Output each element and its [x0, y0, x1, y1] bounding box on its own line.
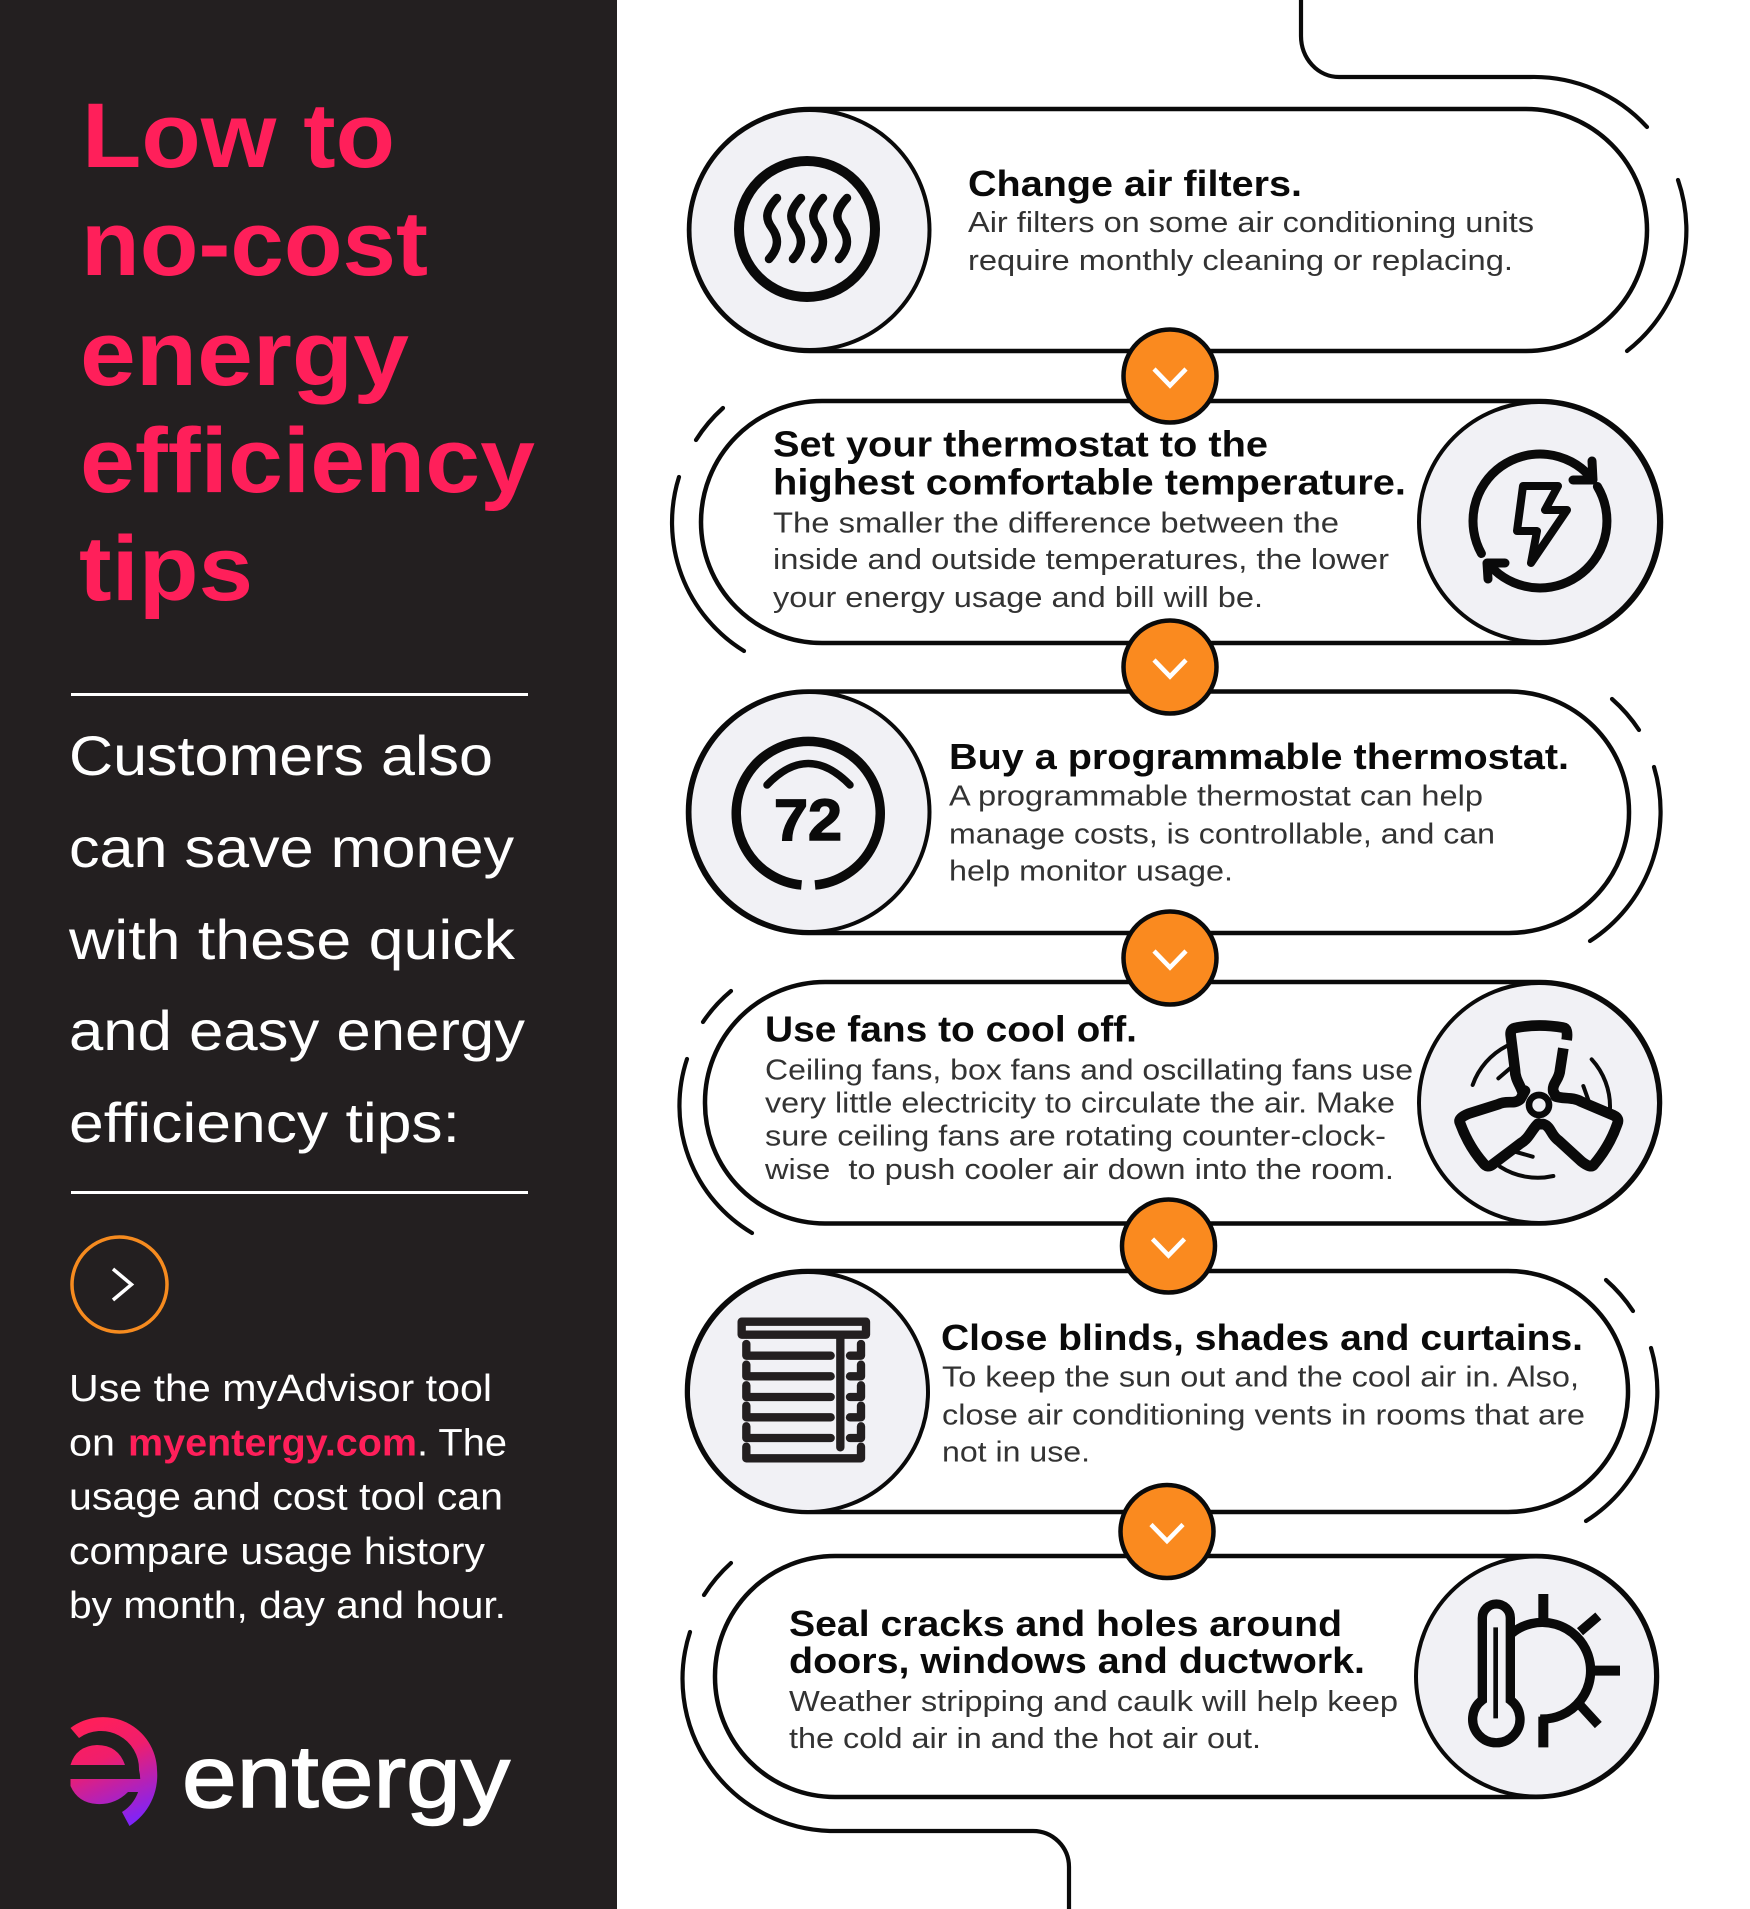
arrow button 4: [1122, 1200, 1215, 1292]
myAdvisor paragraph: by month, day and hour.: [69, 1585, 506, 1627]
myAdvisor paragraph: myentergy.com: [128, 1422, 417, 1464]
text: use fans: Ceiling fans, box fans and oscillating fans use: [765, 1054, 1413, 1086]
icon: energy cycle bolt: [1473, 454, 1607, 588]
text: seal cracks: [789, 1603, 1398, 1755]
text: change air filters: Change air filters.: [968, 163, 1302, 204]
title: efficiency: [80, 410, 535, 512]
text: use fans: wise to push cooler air down into the room.: [764, 1154, 1394, 1186]
panel: use fans: [705, 982, 1660, 1224]
text: set your thermostat: The smaller the difference between the: [773, 508, 1339, 540]
icon: heat vent: [739, 161, 875, 297]
myAdvisor paragraph: compare usage history: [69, 1531, 485, 1573]
panel: change air filters: [689, 109, 1647, 351]
text: change air filters: Air filters on some air conditioning units: [968, 207, 1534, 239]
text: buy a programmable thermostat: A programmable thermostat can help: [949, 780, 1483, 812]
text: set your thermostat: Set your thermostat to the: [773, 424, 1268, 464]
text: close blinds: Close blinds, shades and curtains.: [941, 1317, 1583, 1358]
intro text: Customers also: [69, 724, 493, 787]
panel: close blinds: [687, 1271, 1628, 1512]
myAdvisor paragraph: usage and cost tool can: [69, 1477, 503, 1519]
panel: left sidebar: [0, 0, 617, 1909]
connector: top line and card 1 arcs: [1301, 0, 1686, 351]
title: energy: [80, 303, 409, 405]
text: set your thermostat: [773, 424, 1406, 614]
icon: thermometer and sun: [1473, 1594, 1620, 1747]
text: use fans: [764, 1008, 1413, 1186]
text: change air filters: require monthly cleaning or replacing.: [968, 245, 1513, 277]
text: close blinds: [941, 1317, 1585, 1468]
title: tips: [79, 518, 253, 620]
text: set your thermostat: highest comfortable temperature.: [773, 462, 1406, 502]
text: change air filters: [968, 163, 1534, 277]
text: buy a programmable thermostat: manage costs, is controllable, and can: [949, 818, 1495, 850]
text: set your thermostat: inside and outside temperatures, the lower: [773, 544, 1389, 576]
text: close blinds: To keep the sun out and the cool air in. Also,: [942, 1362, 1579, 1394]
myAdvisor paragraph: on: [69, 1422, 115, 1464]
connector: card 6 arcs and bottom line: [683, 1563, 1069, 1909]
text: close blinds: not in use.: [942, 1436, 1090, 1468]
arrow button 5: [1120, 1485, 1214, 1578]
text: seal cracks: doors, windows and ductwork.: [789, 1640, 1365, 1681]
myAdvisor paragraph: [69, 1368, 507, 1627]
icon: thermostat 72: [736, 741, 880, 885]
arrow button 2: [1124, 620, 1216, 714]
text: use fans: very little electricity to circulate the air. Make: [765, 1088, 1395, 1120]
intro text: efficiency tips:: [69, 1091, 460, 1154]
text: seal cracks: the cold air in and the hot air out.: [789, 1723, 1261, 1755]
arrow button 3: [1124, 912, 1216, 1004]
intro text: can save money: [69, 816, 514, 879]
card 4 side arcs: [679, 991, 752, 1233]
title: Low to: [82, 85, 395, 187]
text: use fans: sure ceiling fans are rotating counter-clock-: [765, 1120, 1386, 1152]
card 2 side arcs: [672, 408, 744, 651]
myAdvisor paragraph: . The: [417, 1422, 507, 1464]
arrow button 1: [1124, 330, 1216, 422]
text: buy a programmable thermostat: [949, 736, 1569, 888]
text: buy a programmable thermostat: help monitor usage.: [949, 856, 1233, 888]
intro text: and easy energy: [69, 999, 525, 1062]
panel: buy a programmable thermostat: [688, 692, 1629, 933]
icon: thermostat 72: 72: [774, 788, 842, 853]
title: [79, 85, 535, 620]
text: seal cracks: Seal cracks and holes around: [789, 1603, 1342, 1644]
card 3 side arcs: [1590, 699, 1661, 941]
text: set your thermostat: your energy usage and bill will be.: [773, 582, 1263, 614]
text: seal cracks: Weather stripping and caulk will help keep: [789, 1686, 1398, 1718]
intro text: [68, 724, 525, 1154]
intro text: with these quick: [68, 908, 516, 971]
myAdvisor paragraph: Use the myAdvisor tool: [69, 1368, 492, 1410]
card 5 side arcs: [1586, 1280, 1657, 1521]
logo: entergy: [70, 1717, 510, 1826]
logo: entergy: entergy: [182, 1727, 510, 1826]
icon: orange circle arrow: [72, 1237, 167, 1332]
icon: window blinds: [742, 1322, 866, 1458]
text: use fans: Use fans to cool off.: [765, 1008, 1137, 1050]
icon: fan: [1456, 1025, 1622, 1178]
panel: set your thermostat: [701, 401, 1661, 643]
text: close blinds: close air conditioning vents in rooms that are: [942, 1400, 1585, 1432]
title: no-cost: [81, 193, 428, 295]
panel: seal cracks: [715, 1556, 1657, 1797]
text: buy a programmable thermostat: Buy a programmable thermostat.: [949, 736, 1569, 777]
